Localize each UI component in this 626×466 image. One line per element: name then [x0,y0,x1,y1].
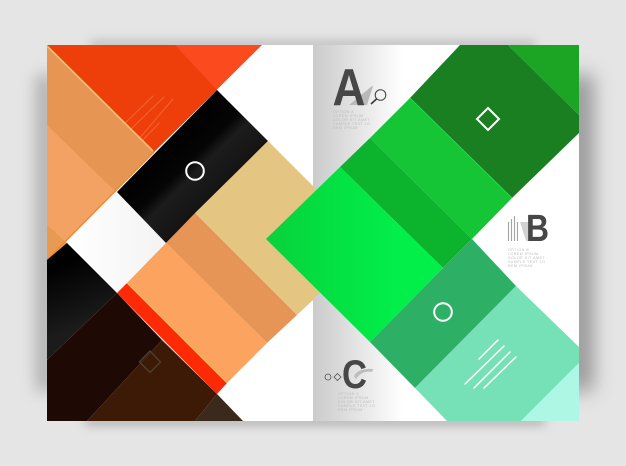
shape: light green corner [508,45,579,115]
caption C: LOREM IPSUM [338,396,369,400]
panel: right page [266,45,579,421]
icon: diamond on dark green [477,108,499,130]
letter A: A [332,59,366,117]
icon: circle on black [186,162,204,180]
icon: small circle and diamond [325,374,341,380]
shape: bright red top triangle [47,45,262,152]
caption C: OPTION C [338,392,359,396]
highlight on red edge [127,283,227,383]
caption B: SAMPLE TEXT LO [508,260,545,264]
caption B [508,248,545,268]
shape: pale mint corner [521,363,579,421]
caption A: SAMPLE TEXT LO [333,122,370,126]
icon: bars [508,216,518,241]
shape: black lower band [47,243,117,360]
shape: orange triangle [47,45,154,260]
shape: brown panel [87,340,217,421]
caption C [338,392,375,412]
callout C [325,353,375,412]
letter C: C [342,353,367,397]
shape: light orange panel [127,243,267,383]
caption C: REM IPSUM [338,408,363,412]
shape: orange rim [47,152,154,260]
icon: circle on teal [434,303,452,321]
shape: light orange band [47,125,115,260]
letter shadow C [354,369,373,379]
highlight on mid green edge [410,98,512,198]
caption A: DOLOR SIT AMET [333,118,370,122]
caption B: OPTION B [508,248,529,252]
caption A: LOREM IPSUM [333,114,364,118]
caption C: SAMPLE TEXT LO [338,404,375,408]
shape: bright green panel [266,167,443,342]
decorative lines on red [123,96,173,142]
shape: maroon panel [47,293,162,421]
caption B: DOLOR SIT AMET [508,256,545,260]
shape: dark red triangle [47,45,217,152]
shape: dark orange band [166,213,297,343]
icon: magnifier [371,90,386,104]
shape: mint panel [415,286,579,421]
shape: red band [117,283,227,394]
caption A [333,110,370,130]
caption C: DOLOR SIT AMET [338,400,375,404]
highlight on orange edge [47,46,153,151]
icon: faint diamond [140,351,160,372]
shape: black band [117,90,268,243]
shape: teal green panel [370,239,516,388]
letter B: B [526,208,549,250]
shape: orange tip [47,225,68,260]
shape: mid green panel [370,98,512,239]
caption B: REM IPSUM [508,264,533,268]
caption B: LOREM IPSUM [508,252,539,256]
callout B [508,208,549,268]
panel: left page [47,45,372,421]
shape: brown corner [195,394,243,421]
icon: lines on mint [465,340,516,388]
shape: dark green panel [410,45,579,198]
letter shadow A [349,86,373,105]
shape: white diamond [67,192,166,293]
page shadow [37,41,592,425]
callout A [332,59,386,130]
shape: tan band [195,141,372,315]
caption A: REM IPSUM [333,126,358,130]
caption A: OPTION A [333,110,354,114]
letter shadow B [520,222,532,241]
shape: tan tip [313,186,320,299]
shape: deep green band [340,138,472,268]
